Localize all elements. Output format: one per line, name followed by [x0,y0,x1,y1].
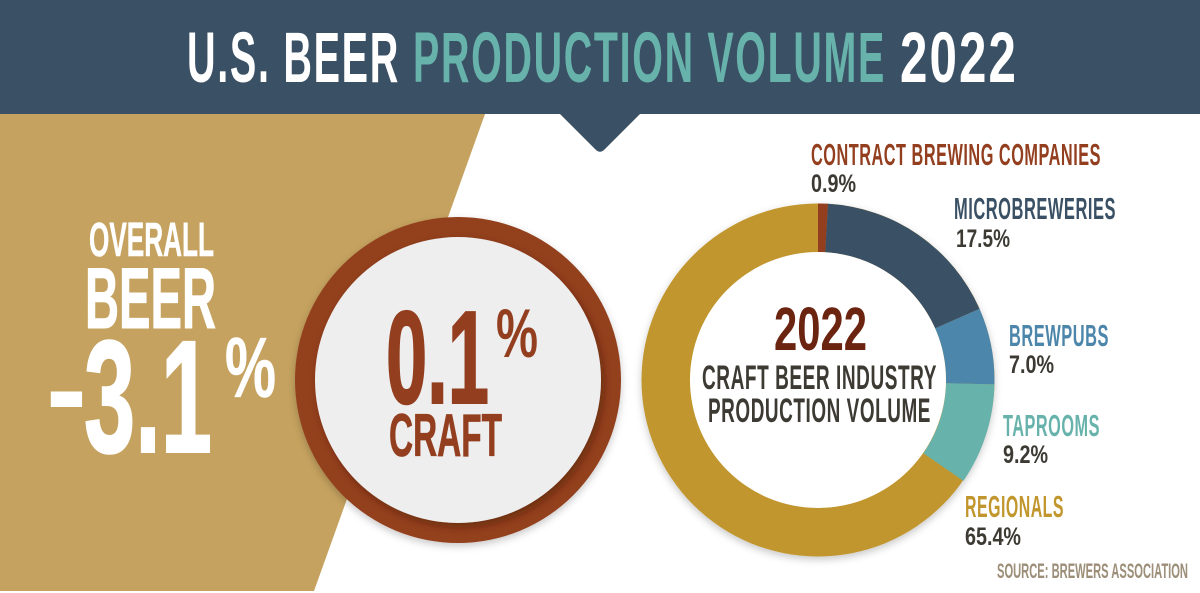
craft circle: 0.1 [386,284,489,431]
label: microbreweries [954,191,1116,253]
label: taprooms: 9.2% [1003,441,1048,469]
slice: taprooms [923,383,994,481]
panel: gold background [0,114,485,591]
label: regionals: REGIONALS [965,489,1064,524]
overall beer stat: 3.1 [84,307,212,486]
header banner with pointer [0,0,1200,152]
label: taprooms [1003,408,1100,469]
overall beer stat [46,214,276,486]
overall beer stat: BEER [85,251,216,347]
donut center label: PRODUCTION VOLUME [708,392,931,430]
label: regionals: 65.4% [965,523,1021,551]
slice: contract brewing [818,204,828,252]
label: contract brewing companies: 0.9% [811,170,856,198]
slice: center hole [690,252,946,508]
title: 2022 [900,19,1018,98]
label: brewpubs [1009,318,1109,379]
label: contract brewing companies [811,137,1101,198]
donut center label: 2022 [774,295,867,363]
label: brewpubs: BREWPUBS [1009,318,1109,353]
overall beer stat: OVERALL [89,214,214,267]
title: U.S. BEER [187,19,400,98]
slice: brewpubs [935,309,994,384]
craft circle [295,217,621,543]
donut center label: CRAFT BEER INDUSTRY [702,359,937,397]
overall beer stat: % [225,321,276,416]
donut center label [702,295,937,430]
title [187,19,1018,98]
overall beer stat: - [46,315,87,461]
label: taprooms: TAPROOMS [1003,408,1100,443]
label: microbreweries: 17.5% [956,225,1010,253]
label: brewpubs: 7.0% [1009,351,1054,379]
donut chart [642,204,994,556]
slice: microbreweries [825,204,980,328]
craft circle: CRAFT [389,402,502,469]
craft circle: % [496,295,538,372]
label: regionals [965,489,1064,551]
